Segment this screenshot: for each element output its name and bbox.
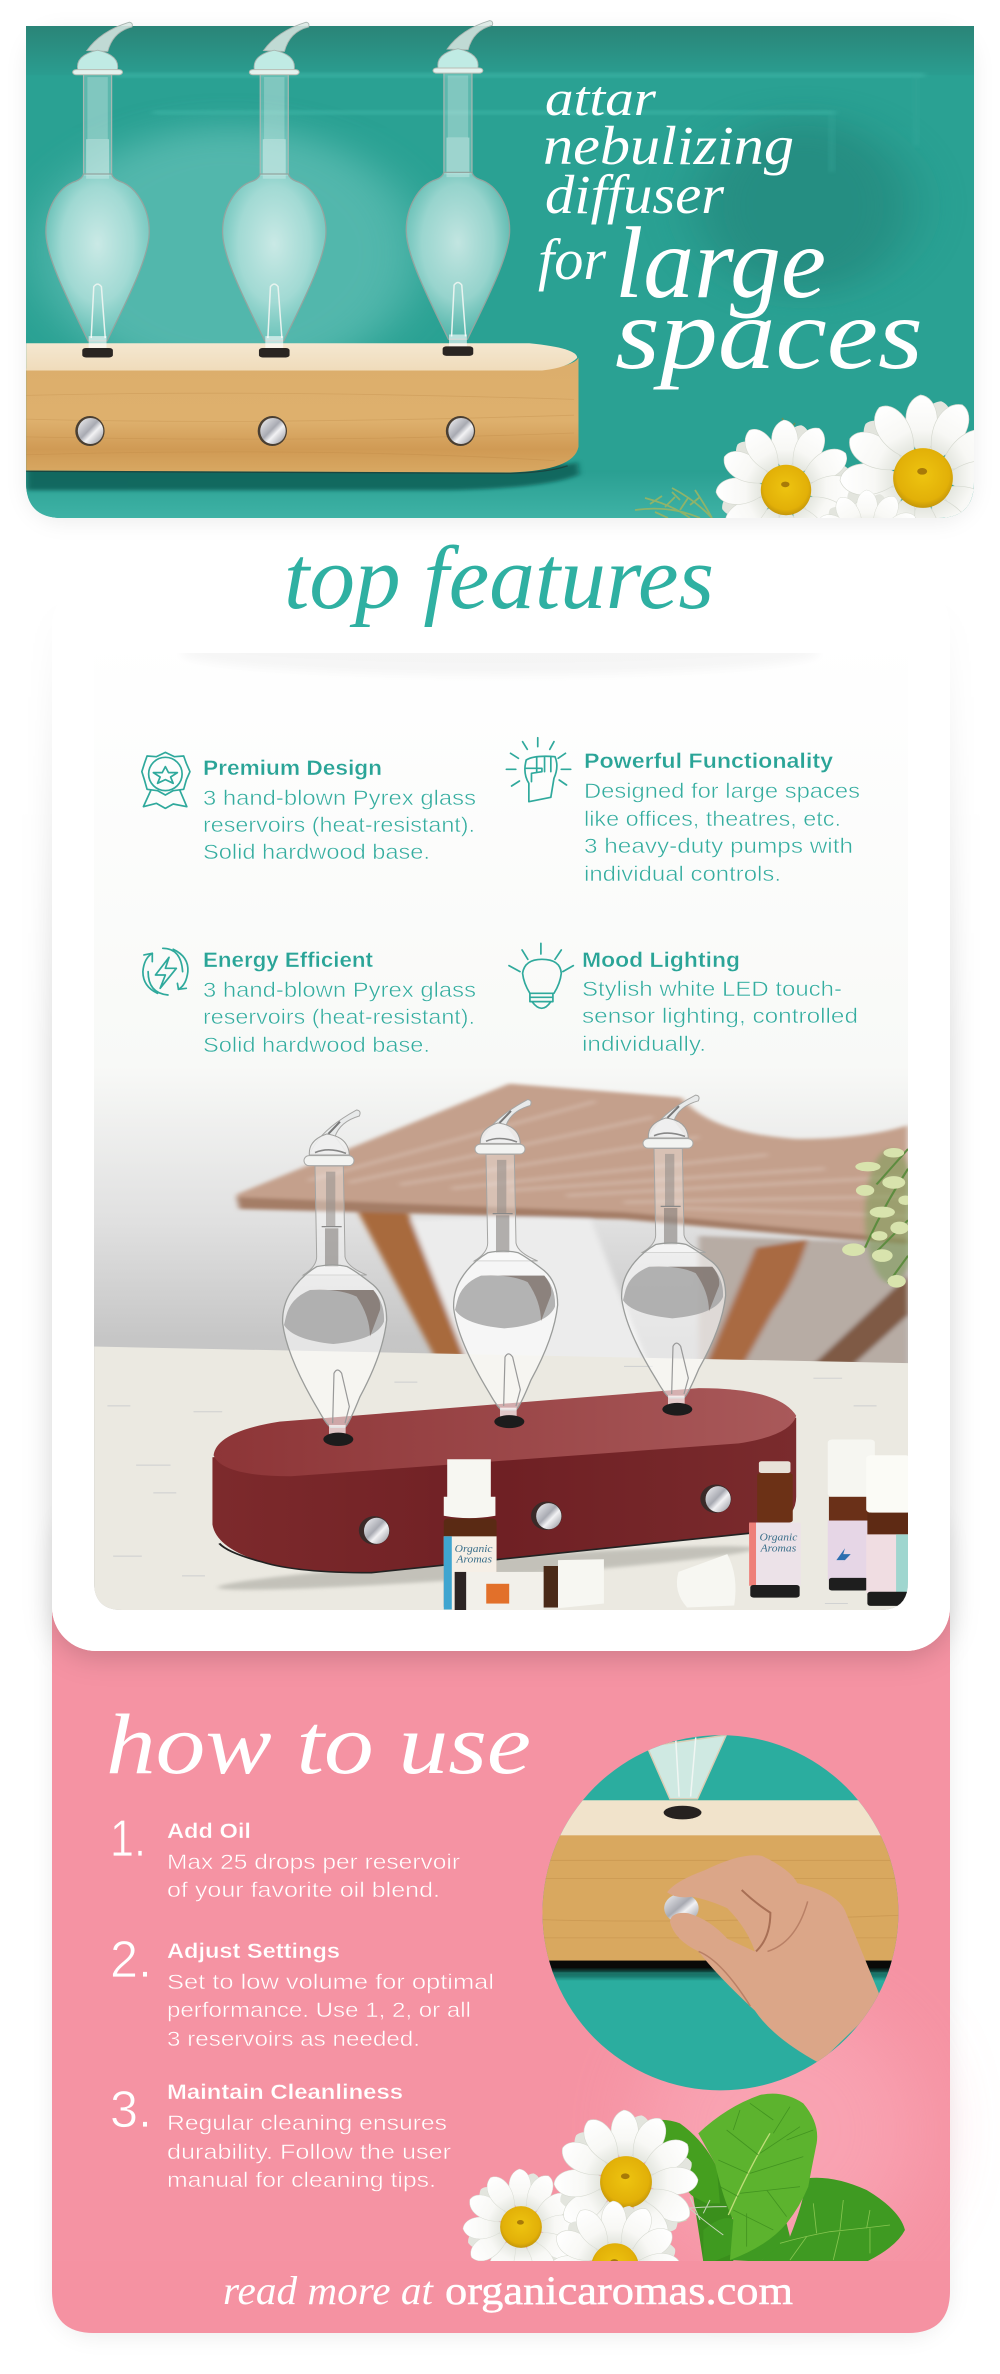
step 2: 2.: [110, 1931, 152, 1989]
pink background: [52, 1500, 950, 2333]
step 3: durability. Follow the user: [167, 2141, 451, 2164]
icon: raised fist: [506, 738, 571, 802]
step 3: Maintain Cleanliness: [167, 2081, 403, 2104]
scene photo: diffuser on marble counter: [94, 1068, 908, 1610]
scene photo: diffuser on marble counter: Organic: [759, 1531, 798, 1543]
scene photo: diffuser on marble counter: Aromas: [455, 1554, 492, 1565]
section heading: how to use: how to use: [106, 1696, 531, 1792]
feature: mood lighting: individually.: [582, 1033, 706, 1056]
icon: rosette badge: [142, 752, 190, 808]
white card: [52, 582, 950, 1651]
feature: mood lighting: sensor lighting, controlled: [582, 1005, 858, 1028]
step 3: 3.: [110, 2081, 152, 2139]
feature: powerful functionality: 3 heavy-duty pumps with: [584, 835, 853, 858]
step 3: [110, 2081, 451, 2192]
step 1: 1.: [110, 1810, 146, 1868]
feature: powerful functionality: Powerful Functionality: [584, 750, 833, 773]
footer: read more link: organicaromas.com: [445, 2268, 793, 2313]
feature: premium design: reservoirs (heat-resistant).: [203, 814, 475, 837]
hero daisies: [634, 394, 974, 518]
step 1: Max 25 drops per reservoir: [167, 1851, 460, 1874]
card shadow fading upward: [40, 770, 962, 1668]
feature: energy efficient: Energy Efficient: [203, 949, 373, 972]
hero title: spaces: [615, 278, 923, 391]
scene photo: diffuser on marble counter: Aromas: [760, 1543, 796, 1554]
feature: mood lighting: [509, 943, 858, 1056]
step 2: performance. Use 1, 2, or all: [167, 1999, 471, 2022]
step 1: of your favorite oil blend.: [167, 1879, 440, 1902]
hero title: diffuser: [545, 164, 725, 225]
panel: top features card: [52, 529, 950, 1651]
hero title: large: [615, 207, 826, 320]
step 2: Adjust Settings: [167, 1940, 340, 1963]
feature: premium design: Premium Design: [203, 757, 382, 780]
hero teal background: [19, 24, 982, 526]
step 3: Regular cleaning ensures: [167, 2112, 447, 2135]
feature: powerful functionality: like offices, theatres, etc.: [584, 808, 841, 831]
step 2: [110, 1931, 494, 2051]
feature: energy efficient: reservoirs (heat-resistant).: [203, 1006, 475, 1029]
feature: powerful functionality: Designed for large spaces: [584, 780, 860, 803]
hero title: [538, 70, 923, 391]
feature: premium design: Solid hardwood base.: [203, 841, 430, 864]
flowers and mint leaves: [462, 2094, 905, 2261]
feature: powerful functionality: individual controls.: [584, 863, 781, 886]
footer: read more link: [223, 2268, 793, 2313]
icon: light bulb: [509, 943, 573, 1008]
hero title: attar: [545, 70, 657, 126]
feature: powerful functionality: [506, 738, 860, 886]
soft highlight: [640, 2000, 920, 2260]
scene photo: diffuser on marble counter: Organic: [455, 1543, 493, 1555]
footer: read more link: read more at: [223, 2268, 434, 2313]
feature: mood lighting: Mood Lighting: [582, 949, 740, 972]
feature: mood lighting: Stylish white LED touch-: [582, 978, 842, 1001]
glass reservoirs: [46, 21, 510, 357]
step 3: manual for cleaning tips.: [167, 2169, 436, 2192]
hero title: nebulizing: [543, 115, 794, 176]
icon: recycling bolt: [143, 948, 188, 995]
footer band: [52, 2261, 950, 2333]
section heading: top features: top features: [284, 529, 714, 628]
step 2: 3 reservoirs as needed.: [167, 2028, 420, 2051]
circular photo: hand turning knob: [538, 1733, 905, 2097]
feature: energy efficient: Solid hardwood base.: [203, 1034, 430, 1057]
glass reservoirs on mahogany base: [283, 1095, 726, 1446]
hero shadow: [26, 26, 974, 518]
panel: how to use: [52, 1500, 950, 2333]
feature: premium design: [142, 752, 476, 864]
feature: premium design: 3 hand-blown Pyrex glass: [203, 787, 476, 810]
feature: energy efficient: 3 hand-blown Pyrex glass: [203, 979, 476, 1002]
hero title: for: [538, 227, 606, 292]
step 1: Add Oil: [167, 1820, 251, 1843]
step 1: [110, 1810, 460, 1902]
knobs: [75, 416, 475, 446]
panel: hero banner: [26, 20, 974, 522]
feature: energy efficient: [143, 948, 476, 1057]
step 2: Set to low volume for optimal: [167, 1971, 494, 1994]
wooden diffuser base: [26, 343, 579, 490]
soft divider shadow: [202, 653, 798, 669]
